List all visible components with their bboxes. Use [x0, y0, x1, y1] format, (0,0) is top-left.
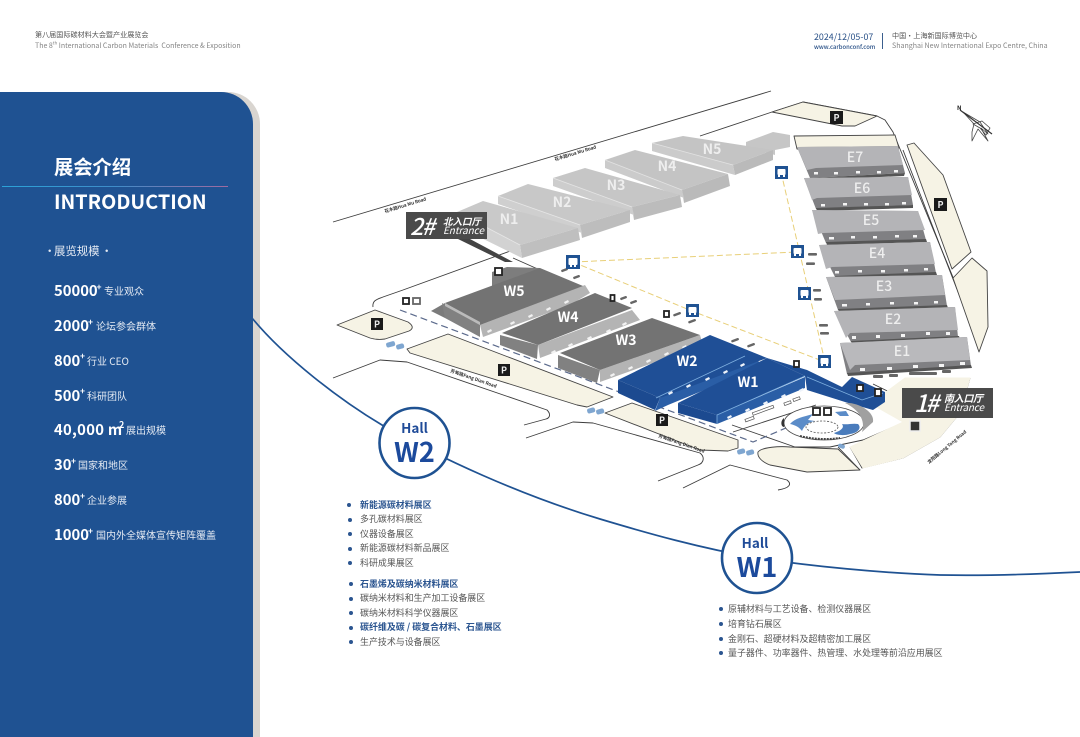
hall E4 — [819, 242, 937, 279]
stat: exhibitors: 800 — [54, 489, 80, 510]
entrance 1 number: 1# — [914, 384, 942, 419]
hall E7 — [797, 146, 905, 180]
bus stop west — [686, 304, 699, 317]
entrance corridor — [767, 358, 885, 410]
zone: research results: 科研成果展区 — [360, 556, 414, 569]
venue Chinese: 中国·上海新国际博览中心 — [892, 31, 977, 41]
stat: countries: 国家和地区 — [78, 457, 128, 472]
subheading exhibition scale: · — [101, 243, 112, 259]
hall labels west: W4 — [557, 307, 579, 327]
stat: media: 1000 — [54, 524, 89, 545]
icon: north compass plane — [957, 103, 992, 141]
shuttle routes — [573, 172, 825, 362]
hall labels east: E5 — [863, 210, 879, 230]
stat: CEO: + — [80, 350, 85, 362]
sidebar heading Chinese: 展会介绍 — [54, 152, 131, 180]
header: date and website — [814, 30, 875, 51]
plaza inner ring — [806, 421, 838, 433]
hall windows blue — [668, 363, 804, 419]
road name Long Yang: 龙阳路Long Yang Road — [926, 428, 968, 466]
W2 ring — [380, 408, 450, 478]
hall N4 — [605, 150, 730, 203]
hall E5 — [812, 210, 927, 245]
panel: introduction sidebar — [0, 92, 253, 737]
parking sign north — [830, 111, 843, 124]
roads and parking — [333, 91, 988, 490]
canopy arc — [845, 403, 873, 432]
taxi stand icon — [910, 421, 920, 431]
zone: instruments: 仪器设备展区 — [360, 527, 414, 540]
hall labels west: W3 — [615, 330, 637, 350]
stat: forum: + — [88, 316, 93, 328]
hall labels east: E1 — [894, 341, 910, 361]
hall labels east: E7 — [847, 147, 863, 167]
subheading exhibition scale: · — [44, 243, 55, 259]
plaza ring — [784, 406, 864, 440]
parking sign east — [934, 198, 947, 211]
stat: exhibition area: 展出规模 — [126, 422, 166, 437]
hall labels east: E2 — [885, 309, 901, 329]
stat: research teams: + — [80, 385, 85, 397]
bullets W1 — [719, 607, 723, 655]
entrance 2 box — [406, 212, 487, 239]
west halls grey — [431, 267, 703, 383]
stat: visitors: 专业观众 — [104, 283, 144, 298]
sculpture — [781, 418, 784, 427]
compass letter: N — [957, 103, 962, 112]
hall labels north: N4 — [658, 156, 676, 176]
zone: quantum devices: 量子器件、功率器件、热管理、水处理等前沿应用展区 — [728, 646, 943, 659]
hall E3 — [826, 275, 948, 312]
hall labels east: E6 — [854, 178, 870, 198]
zone: new energy carbon: 新能源碳材料展区 — [360, 498, 432, 511]
stat: exhibitors: 企业参展 — [87, 492, 127, 507]
east halls — [797, 146, 972, 376]
stat: countries: + — [71, 455, 76, 467]
hall E2 — [834, 307, 960, 344]
stat: forum: 2000 — [54, 315, 89, 336]
corridor edge — [807, 377, 883, 400]
stat: exhibitors — [54, 489, 127, 510]
venue English: Shanghai New International Expo Centre, China — [892, 41, 1048, 51]
parking east — [907, 143, 971, 269]
stat: CEO: 行业 CEO — [87, 353, 129, 368]
zone: graphene: 石墨烯及碳纳米材料展区 — [360, 577, 458, 590]
header: conference name — [35, 30, 241, 51]
stat: media: + — [88, 524, 93, 536]
stat: countries — [54, 454, 128, 475]
hall labels east: E3 — [876, 276, 892, 296]
zone: nano processing: 碳纳米材料和生产加工设备展区 — [360, 591, 485, 604]
hall labels north: N3 — [607, 175, 625, 195]
hall N1 — [457, 201, 580, 258]
parking sign north: P — [833, 111, 840, 124]
entrance 1 box — [902, 388, 993, 418]
hall N3 — [553, 168, 682, 220]
plaza swirl left — [790, 414, 815, 431]
list: Hall W1 zones — [719, 602, 943, 659]
hall windows west — [487, 300, 687, 377]
entrance 2 Chinese: 北入口厅 — [443, 214, 482, 228]
subheading exhibition scale: 展览规模 — [54, 243, 100, 259]
road name Fang Dian east: 芳甸路Fang Dian Road — [657, 432, 706, 455]
bus stop north-east — [775, 166, 788, 179]
zone: diamond growth: 培育钻石展区 — [728, 617, 782, 630]
forecourt parking pills — [745, 397, 800, 422]
stat: media: 国内外全媒体宣传矩阵覆盖 — [96, 527, 216, 542]
date: 2024/12/05-07 — [814, 30, 873, 43]
stat: forum — [54, 315, 156, 336]
hall E6 — [804, 177, 913, 211]
parking south — [605, 403, 738, 451]
hall labels blue: W1 — [737, 372, 759, 392]
stat: visitors — [54, 280, 144, 301]
W1 name: W1 — [737, 546, 777, 585]
hall labels north: N1 — [500, 209, 518, 229]
stat: research teams: 500 — [54, 385, 80, 406]
blue highlighted halls — [618, 335, 885, 424]
perimeter dashed path — [400, 310, 793, 442]
parking north — [772, 102, 877, 126]
road names — [384, 144, 968, 466]
hall W1 — [678, 358, 805, 424]
stat: research teams — [54, 385, 127, 406]
entrance 1 English: Entrance — [944, 399, 985, 414]
parking east lower — [953, 258, 988, 352]
hall labels west: W5 — [503, 281, 525, 301]
parking west — [337, 310, 412, 339]
stat: CEO: 800 — [54, 350, 80, 371]
parking sign east: P — [937, 198, 944, 211]
hall W5 — [431, 267, 590, 337]
zone: new products: 新能源碳材料新品展区 — [360, 541, 449, 554]
W1 hall word: Hall — [742, 532, 768, 552]
zone: porous carbon: 多孔碳材料展区 — [360, 512, 423, 525]
zone: auxiliary materials: 原辅材料与工艺设备、检测仪器展区 — [728, 602, 871, 615]
hall W3 — [558, 318, 703, 383]
entrance 2 number: 2# — [410, 208, 438, 242]
hall labels west — [503, 281, 637, 350]
conference name Chinese: 第八届国际碳材料大会暨产业展览会 — [35, 30, 148, 40]
parking south-west — [407, 334, 613, 407]
hall N5 — [652, 136, 773, 175]
stat: exhibition area — [54, 418, 166, 440]
stat: countries: 30 — [54, 454, 71, 475]
zone: carbon fiber: 碳纤维及碳 / 碳复合材料、石墨展区 — [360, 620, 502, 633]
hall labels blue — [676, 351, 759, 392]
entrance 1 callout — [902, 384, 993, 419]
plaza swirl right — [834, 424, 860, 435]
parking sign south-west: P — [501, 364, 507, 376]
plaza parking left — [758, 447, 860, 472]
stat: research teams: 科研团队 — [87, 388, 127, 403]
hall W2 — [618, 335, 767, 411]
sidebar heading English: INTRODUCTION — [54, 186, 207, 215]
entrance 2 callout — [406, 208, 487, 242]
connector curve — [252, 318, 1080, 575]
zone: superhard: 金刚石、超硬材料及超精密加工展区 — [728, 632, 871, 645]
stat: visitors: + — [96, 280, 102, 292]
W1 ring — [722, 523, 792, 593]
road name Hua Mu west: 花木路Hua Mu Road — [384, 196, 427, 215]
entrance 1 Chinese: 南入口厅 — [944, 390, 985, 405]
W2 name: W2 — [394, 431, 435, 470]
hall labels east — [847, 147, 910, 361]
central plaza — [781, 403, 873, 440]
callout: Hall W1 — [722, 523, 792, 593]
stat: forum: 论坛参会群体 — [96, 318, 156, 333]
hall labels blue: W2 — [676, 351, 698, 371]
parking sign south: P — [659, 414, 665, 426]
plaza parking right — [850, 378, 970, 468]
callout: Hall W2 — [380, 408, 450, 478]
header divider — [882, 33, 883, 49]
hall E1 — [840, 337, 972, 376]
bus stop icons — [566, 166, 831, 368]
parking sign south-west — [498, 364, 510, 376]
bus stop east upper — [791, 245, 804, 258]
stat: visitors: 50000 — [54, 280, 98, 301]
stat: CEO — [54, 350, 129, 371]
hall N2 — [498, 184, 630, 238]
sidebar shadow band — [0, 92, 260, 737]
stat: media — [54, 524, 216, 545]
parking sign west: P — [374, 318, 380, 330]
stat: exhibition area: 40,000 m — [54, 419, 122, 440]
bus stop south — [818, 355, 831, 368]
hall labels north: N5 — [703, 139, 721, 159]
road name Fang Dian west: 芳甸路Fang Dian Road — [449, 367, 498, 390]
service markers — [561, 253, 951, 378]
hall labels north: N2 — [553, 192, 571, 212]
conference name English: The 8th International Carbon Materials Conference & Exposition — [35, 41, 241, 51]
road name Hua Mu east: 花木路Hua Mu Road — [554, 144, 597, 163]
website: www.carbonconf.com — [814, 42, 875, 51]
hall N5 annex — [746, 132, 790, 155]
north halls — [457, 132, 790, 258]
zone: production tech: 生产技术与设备展区 — [360, 635, 440, 648]
sidebar heading rule — [2, 186, 228, 187]
W2 hall word: Hall — [401, 417, 428, 437]
list: Hall W2 zones — [347, 498, 502, 648]
zone: nano science: 碳纳米材料科学仪器展区 — [360, 606, 458, 619]
entrance 2 pointer — [458, 239, 513, 262]
hall W4 — [500, 293, 640, 359]
plaza seating arc — [800, 436, 840, 439]
pedestrian crossing markers — [386, 341, 845, 456]
small facility icons — [403, 268, 920, 431]
stat: exhibitors: + — [80, 490, 85, 502]
parking signs — [371, 111, 947, 426]
hall labels east: E4 — [869, 243, 885, 263]
plaza top swirl — [835, 411, 849, 416]
parking sign south — [656, 414, 668, 426]
bullets W2 — [347, 503, 353, 644]
parking sign west — [371, 318, 383, 330]
header: venue — [892, 31, 1048, 51]
hall labels north — [500, 139, 721, 229]
bus stop east lower — [798, 287, 811, 300]
parking east strip — [794, 135, 899, 149]
hall windows east — [814, 170, 965, 371]
entrance 2 English: Entrance — [443, 222, 485, 237]
bus stop north-west — [566, 255, 580, 269]
stat: exhibition area: 2 — [119, 418, 124, 431]
subheading exhibition scale — [44, 243, 112, 259]
